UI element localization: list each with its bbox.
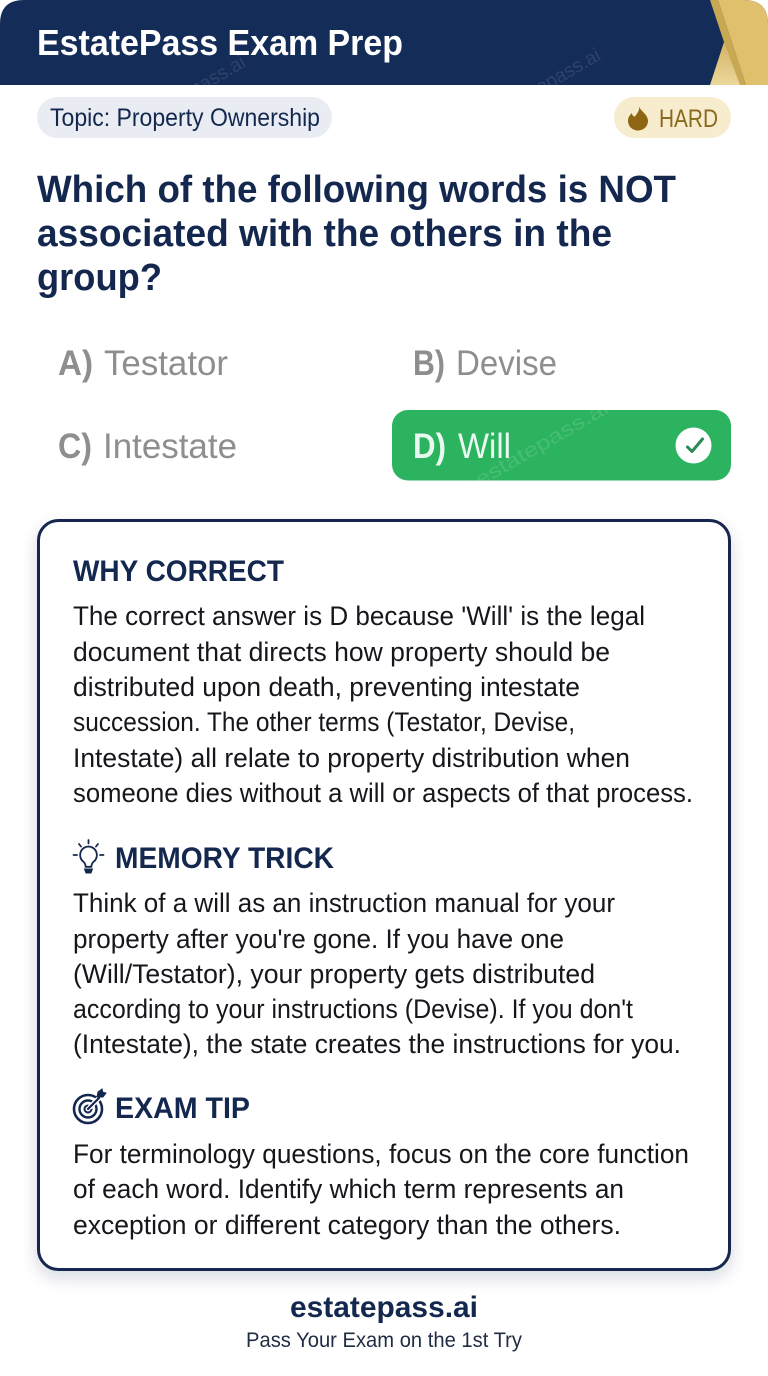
option B: B): [413, 344, 445, 383]
section: exam tip: [73, 1089, 689, 1240]
topic pill: [37, 97, 332, 138]
header watermarks: estatepass.ai: [142, 51, 249, 126]
section: why correct: distributed upon death, preventing intestate: [73, 672, 580, 702]
section: memory trick: Think of a will as an instruction manual for your: [73, 888, 615, 918]
icon: target with arrow: [74, 1089, 106, 1123]
section: memory trick: property after you're gone. If you have one: [73, 924, 564, 954]
option D: correct answer: estatepass.ai: [472, 397, 612, 491]
section: why correct: someone dies without a will or aspects of that process.: [73, 778, 693, 808]
option A: A): [58, 344, 93, 383]
section: memory trick: according to your instructions (Devise). If you don't: [73, 994, 634, 1024]
question: Which of the following words is NOT: [37, 169, 676, 211]
question: [37, 169, 676, 299]
difficulty badge: HARD: [659, 105, 718, 133]
option C: C): [58, 427, 92, 466]
explanation panel: [38, 520, 730, 1270]
option D: correct answer: D): [413, 427, 446, 466]
title: EstatePass Exam Prep: [37, 22, 403, 63]
section: exam tip: EXAM TIP: [115, 1092, 250, 1125]
section: why correct: Intestate) all relate to property distribution when: [73, 743, 630, 773]
gold corner accent: [710, 0, 768, 85]
icon: light bulb: [74, 840, 104, 873]
option D: correct answer: Will: [458, 427, 511, 466]
section: exam tip: For terminology questions, focus on the core function: [73, 1139, 689, 1169]
footer: [246, 1291, 522, 1352]
icon: check: [676, 428, 712, 464]
option B: [413, 344, 557, 383]
icon: flame: [628, 106, 648, 130]
footer: estatepass.ai: [290, 1291, 478, 1324]
option C: Intestate: [103, 427, 237, 466]
header banner: [0, 0, 768, 85]
section: why correct: The correct answer is D because 'Will' is the legal: [73, 601, 645, 631]
section: memory trick: MEMORY TRICK: [115, 842, 334, 875]
section: exam tip: of each word. Identify which term represents an: [73, 1174, 624, 1204]
topic pill: Topic: Property Ownership: [50, 104, 320, 132]
option D: correct answer: [392, 397, 731, 491]
difficulty badge: [614, 97, 731, 138]
header watermarks: estatepass.ai: [496, 44, 604, 119]
section: why correct: [73, 555, 693, 808]
section: memory trick: [73, 840, 681, 1059]
header watermarks: [194, 47, 601, 85]
section: why correct: WHY CORRECT: [73, 555, 284, 588]
question: associated with the others in the: [37, 213, 612, 255]
option A: Testator: [104, 344, 228, 383]
section: why correct: succession. The other terms (Testator, Devise,: [73, 707, 575, 737]
question: group?: [37, 257, 162, 299]
section: why correct: document that directs how property should be: [73, 637, 610, 667]
option B: Devise: [456, 344, 557, 383]
section: memory trick: (Will/Testator), your property gets distributed: [73, 959, 595, 989]
section: exam tip: exception or different category than the others.: [73, 1210, 621, 1240]
footer: Pass Your Exam on the 1st Try: [246, 1329, 522, 1352]
section: memory trick: (Intestate), the state creates the instructions for you.: [73, 1029, 681, 1059]
